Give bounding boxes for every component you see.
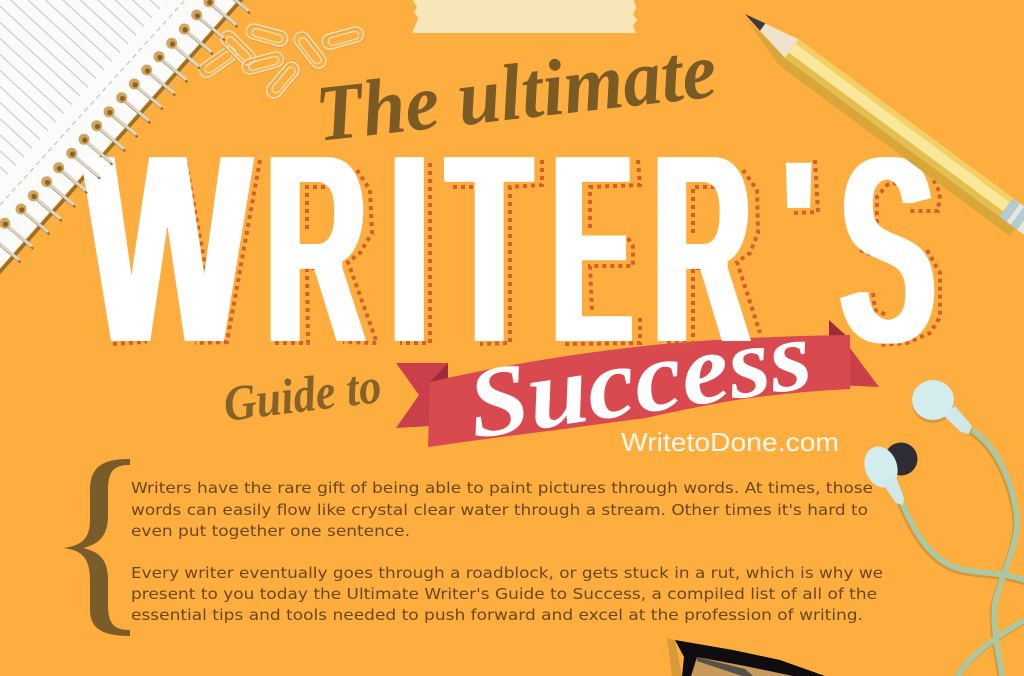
heading: WRITER'S: ' bbox=[783, 116, 814, 345]
heading: WRITER'S: I bbox=[390, 96, 429, 403]
notebook spiral rings bbox=[0, 0, 250, 262]
intro text: even put together one sentence. bbox=[131, 522, 410, 540]
heading: WRITER'S: T bbox=[447, 95, 531, 403]
intro text: Every writer eventually goes through a roadblock, or gets stuck in a rut, which is why we bbox=[131, 564, 883, 582]
intro text: Writers have the rare gift of being able to paint pictures through words. At times, those bbox=[131, 479, 873, 497]
ribbon bbox=[396, 320, 879, 447]
pencil bbox=[733, 5, 1024, 249]
glasses bbox=[667, 638, 825, 676]
intro text: essential tips and tools needed to push forward and excel at the profession of writing. bbox=[131, 606, 863, 624]
heading: WRITER'S: R bbox=[266, 95, 367, 403]
watermark: WritetoDone.com bbox=[621, 427, 839, 457]
heading: WRITER'S: E bbox=[552, 95, 632, 404]
intro text: words can easily flow like crystal clear water through a stream. Other times it's hard to bbox=[131, 501, 868, 519]
notebook bbox=[0, 0, 243, 274]
heading: The ultimate: The ultimate bbox=[311, 27, 721, 159]
heading: WRITER'S: S bbox=[840, 99, 936, 403]
heading: WRITER'S: R bbox=[653, 95, 751, 404]
heading: WRITER'S bbox=[84, 95, 936, 404]
heading: Guide to: Guide to bbox=[221, 357, 384, 432]
intro text bbox=[131, 479, 883, 624]
curly brace bbox=[63, 459, 130, 636]
tape bbox=[412, 0, 637, 33]
paper clips bbox=[196, 22, 366, 102]
intro text: present to you today the Ultimate Writer's Guide to Success, a compiled list of all of the bbox=[131, 585, 877, 603]
earbuds bbox=[859, 380, 1024, 676]
heading: Success: Success bbox=[461, 298, 818, 460]
dotted stitching bbox=[110, 160, 940, 345]
heading: WRITER'S: W bbox=[84, 95, 251, 404]
